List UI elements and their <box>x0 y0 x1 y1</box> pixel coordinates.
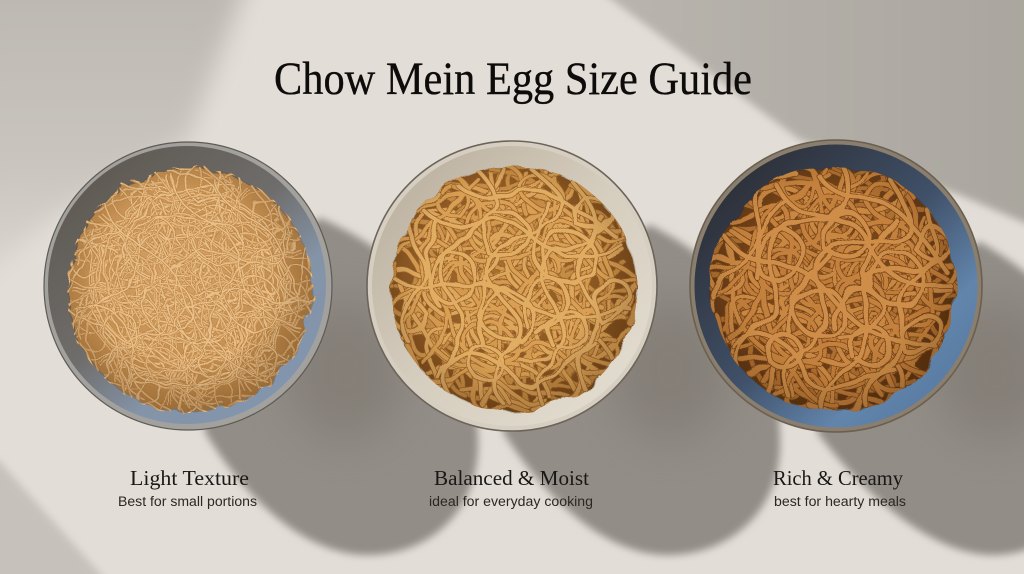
deep shadow core under right bowl <box>935 300 1024 440</box>
caption description: ideal for everyday cooking <box>429 494 593 509</box>
caption heading: Light Texture <box>130 466 249 490</box>
bowl interior <box>48 146 326 424</box>
background: lower-left shade <box>0 440 115 574</box>
panel: rich and creamy bowl <box>689 139 983 433</box>
caption: light texture <box>118 466 257 509</box>
deep shadow core under left bowl <box>285 300 405 440</box>
caption: rich and creamy <box>773 466 906 509</box>
cast shadow: right bowl <box>817 242 1024 555</box>
caption heading: Balanced & Moist <box>434 466 589 490</box>
bowl interior <box>372 146 652 426</box>
panel: light texture bowl <box>43 141 333 431</box>
caption: balanced and moist <box>429 466 593 509</box>
title: Chow Mein Egg Size Guide <box>274 53 752 105</box>
caption description: best for hearty meals <box>774 494 906 509</box>
bowl rim <box>44 142 332 430</box>
bowl rim <box>367 141 657 431</box>
medium noodle mound <box>389 166 638 414</box>
bowl rim <box>690 140 982 432</box>
fine noodle mound <box>67 165 316 414</box>
background: upper-left shade <box>0 0 252 290</box>
cast shadow: middle bowl <box>503 225 780 555</box>
thick noodle mound <box>708 167 958 412</box>
panel: balanced and moist bowl <box>366 140 658 432</box>
caption description: Best for small portions <box>118 494 257 509</box>
caption heading: Rich & Creamy <box>773 466 903 490</box>
bowl interior <box>694 144 978 428</box>
background: upper-right shade <box>572 0 1024 238</box>
deep shadow core under middle bowl <box>610 300 730 440</box>
cast shadow: left bowl <box>200 218 478 555</box>
